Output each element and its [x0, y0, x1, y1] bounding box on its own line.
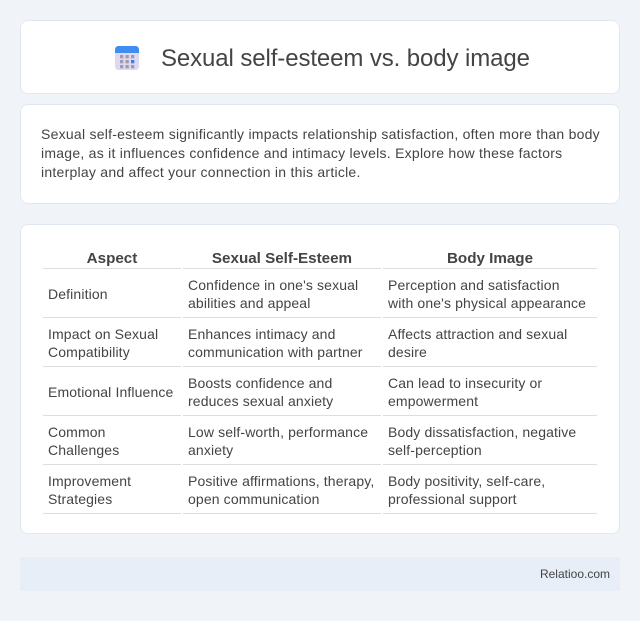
intro text	[41, 126, 600, 180]
row: impact on sexual compatibility: desire	[388, 344, 427, 360]
row: improvement strategies	[43, 473, 597, 514]
row: common challenges	[43, 424, 597, 465]
panel: introduction	[20, 104, 620, 204]
row: improvement strategies: professional support	[388, 491, 517, 507]
row: emotional influence: Emotional Influence	[48, 384, 173, 400]
row: impact on sexual compatibility: communication with partner	[188, 344, 363, 360]
intro text: interplay and affect your connection in this article.	[41, 164, 361, 180]
row: definition	[43, 277, 597, 318]
intro text: Sexual self-esteem significantly impacts relationship satisfaction, often more than body	[41, 126, 600, 142]
row: common challenges: Body dissatisfaction, negative	[388, 424, 576, 440]
row: common challenges: Low self-worth, performance	[188, 424, 368, 440]
intro text: image, as it influences confidence and intimacy levels. Explore how these factors	[41, 145, 562, 161]
row: common challenges: Challenges	[48, 442, 119, 458]
column headings: Aspect	[87, 250, 137, 267]
row: improvement strategies: Improvement	[48, 473, 131, 489]
row: emotional influence: Can lead to insecurity or	[388, 375, 542, 391]
title: Sexual self-esteem vs. body image	[161, 45, 530, 72]
row: emotional influence: reduces sexual anxiety	[188, 393, 333, 409]
row: improvement strategies: Body positivity, self-care,	[388, 473, 545, 489]
row: definition: Perception and satisfaction	[388, 277, 560, 293]
panel: comparison table	[20, 224, 620, 534]
column headings: Body Image	[447, 250, 533, 267]
footer credit: Relatioo.com	[540, 567, 610, 581]
row: improvement strategies: Positive affirmations, therapy,	[188, 473, 374, 489]
row: improvement strategies: open communication	[188, 491, 320, 507]
row: definition: Definition	[48, 286, 108, 302]
column headings	[43, 250, 597, 269]
row: impact on sexual compatibility: Affects attraction and sexual	[388, 326, 567, 342]
row: emotional influence: empowerment	[388, 393, 478, 409]
row: impact on sexual compatibility: Impact on Sexual	[48, 326, 158, 342]
icon: calendar	[115, 46, 139, 70]
row: impact on sexual compatibility	[43, 326, 597, 367]
row: definition: abilities and appeal	[188, 295, 310, 311]
row: definition: with one's physical appearance	[388, 295, 586, 311]
row: emotional influence: Boosts confidence and	[188, 375, 332, 391]
row: impact on sexual compatibility: Enhances intimacy and	[188, 326, 335, 342]
row: common challenges: self-perception	[388, 442, 482, 458]
row: definition: Confidence in one's sexual	[188, 277, 358, 293]
footer bar	[20, 557, 620, 591]
row: emotional influence	[43, 375, 597, 416]
panel: title card	[20, 20, 620, 94]
row: impact on sexual compatibility: Compatibility	[48, 344, 130, 360]
column headings: Sexual Self-Esteem	[212, 250, 352, 267]
row: common challenges: anxiety	[188, 442, 233, 458]
row: improvement strategies: Strategies	[48, 491, 112, 507]
row: common challenges: Common	[48, 424, 106, 440]
